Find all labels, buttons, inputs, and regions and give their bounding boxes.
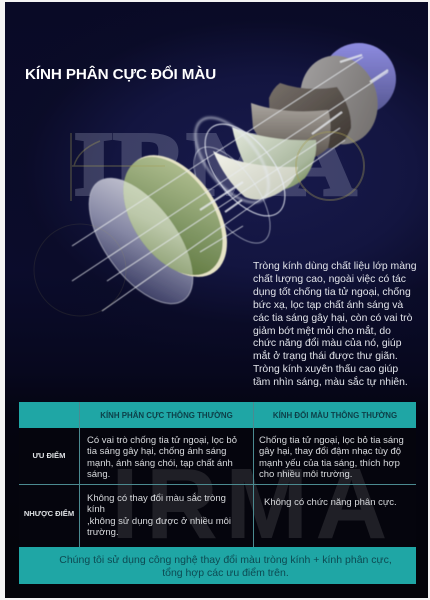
footer summary: Chúng tôi sử dụng công nghệ thay đổi màu tròng kính + kính phân cực, bbox=[59, 554, 392, 566]
text block: lens description: các tia sáng gây hại, còn có vai trò bbox=[253, 313, 412, 324]
column heading: polarized: KÍNH PHÂN CỰC THÔNG THƯỜNG bbox=[100, 411, 233, 420]
cell: polarized advantages bbox=[87, 435, 237, 480]
text block: lens description: Tròng kính xuyên thấu cao giúp bbox=[253, 364, 398, 375]
cell: polarized disadvantages: Không có thay đổi màu sắc tròng bbox=[87, 493, 226, 504]
watermark: IRMA: IRMA bbox=[74, 115, 356, 214]
icon: green lens bbox=[123, 154, 228, 278]
icon: gray front lens bbox=[69, 161, 213, 321]
cell: polarized disadvantages: kính bbox=[87, 504, 105, 515]
cell: polarized advantages: mạnh, ánh sáng chói, tạp chất ánh bbox=[87, 458, 233, 469]
cell: polarized advantages: sáng. bbox=[87, 469, 110, 480]
cell: photochromic advantages: cho nhiều môi trường. bbox=[259, 469, 352, 480]
icon: gray lens layer bbox=[289, 45, 389, 155]
text block: lens description: giảm bớt mệt mỏi cho mắt, do bbox=[253, 326, 391, 337]
text block: lens description: dụng tốt chống tia tử ngoại, chống bbox=[253, 287, 411, 298]
icon: white curved layer bbox=[213, 151, 298, 200]
cell: polarized advantages: tia sáng gây hại, chống ánh sáng bbox=[87, 446, 226, 457]
text block: lens description: chất lượng cao, ngoài việc có tác bbox=[253, 274, 406, 285]
column heading: photochromic: KÍNH ĐỔI MÀU THÔNG THƯỜNG bbox=[273, 411, 397, 420]
icon: blue lens layer bbox=[322, 43, 396, 115]
cell: polarized advantages: Có vai trò chống tia tử ngoại, lọc bỏ bbox=[87, 435, 237, 446]
cell: photochromic advantages: gây hại, thay đổi đậm nhạc tùy độ bbox=[259, 446, 401, 457]
icon: gray brown curved layer bbox=[251, 103, 330, 161]
lens exploded diagram bbox=[34, 42, 397, 316]
icon: glowing swirl rings bbox=[179, 105, 300, 255]
table header band bbox=[19, 402, 416, 428]
cell: photochromic disadvantages: Không có chức năng phân cực. bbox=[264, 497, 397, 508]
title: KÍNH PHÂN CỰC ĐỔI MÀU bbox=[25, 66, 216, 83]
table footer band bbox=[19, 547, 416, 584]
row label: advantages: ƯU ĐIỂM bbox=[33, 451, 65, 460]
cell: photochromic advantages: Chống tia tử ngoại, lọc bỏ tia sáng bbox=[259, 435, 404, 446]
text block: lens description: tầm nhìn sáng, màu sắc tự nhiên. bbox=[253, 377, 408, 388]
footer summary: tổng hợp các ưu điểm trên. bbox=[162, 567, 289, 579]
watermark: IRMA dark: IRMA bbox=[111, 448, 395, 560]
text block: lens description: chức năng đổi màu của nó, giúp bbox=[253, 338, 401, 349]
cell: photochromic advantages: mạnh yếu của tia sáng, thích hợp bbox=[259, 458, 400, 469]
comparison table bbox=[19, 402, 416, 584]
cell: polarized disadvantages bbox=[87, 492, 231, 538]
text block: lens description bbox=[253, 261, 417, 388]
row label: disadvantages: NHƯỢC ĐIỂM bbox=[24, 509, 74, 518]
text block: lens description: Tròng kính dùng chất liệu lớp màng bbox=[253, 261, 417, 272]
cell: polarized disadvantages: ,không sử dụng được ở nhiều môi bbox=[87, 516, 231, 527]
icon: pale green curved layer bbox=[232, 127, 316, 191]
icon: dark brown curved layer bbox=[269, 83, 351, 148]
text block: lens description: bức xạ, lọc tạp chất ánh sáng và bbox=[253, 300, 403, 311]
text block: lens description: mắt ở trạng thái được thư giãn. bbox=[253, 351, 398, 362]
watermark: glasses outline bbox=[34, 132, 364, 316]
icon: light rays bbox=[72, 55, 388, 311]
cell: polarized disadvantages: trường. bbox=[87, 527, 119, 538]
cell: photochromic advantages bbox=[259, 435, 404, 480]
footer summary bbox=[59, 554, 392, 579]
